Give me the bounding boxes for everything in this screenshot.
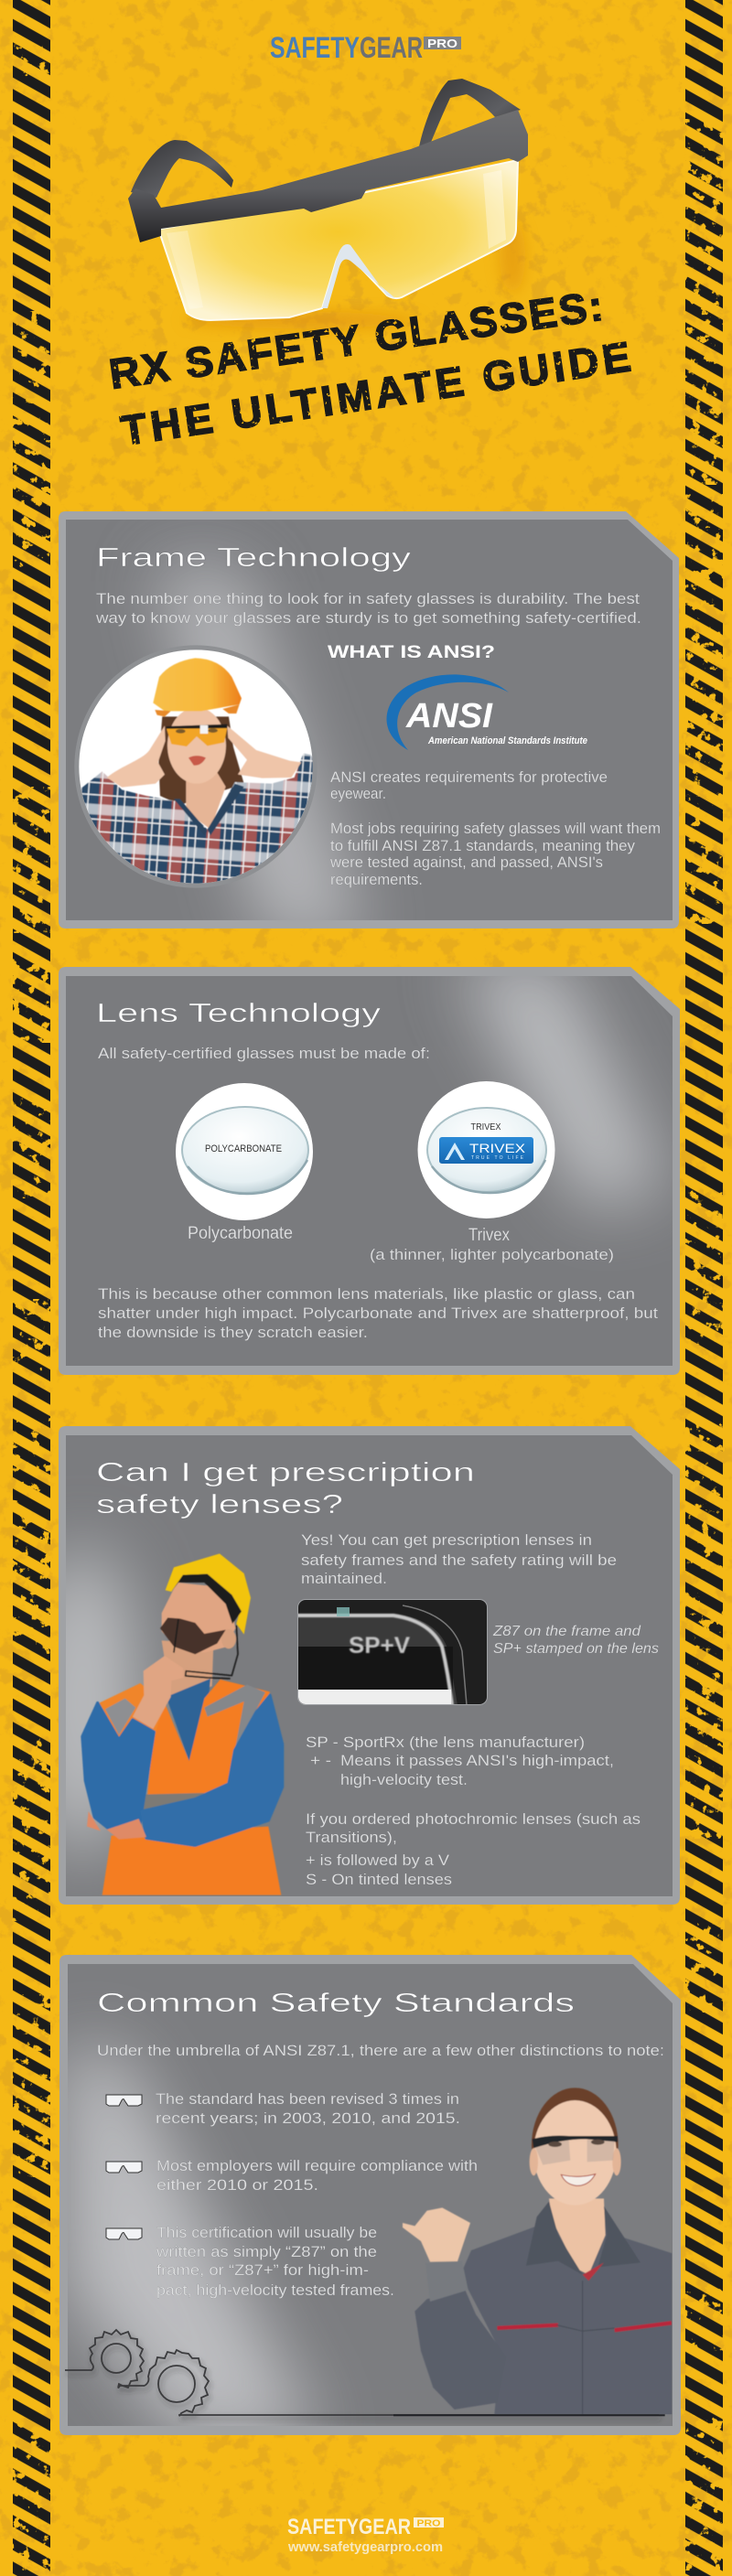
ANSI logo [387, 674, 587, 750]
website url: www.safetygearpro.com [287, 2539, 443, 2555]
explanation text [98, 1285, 658, 1341]
bullet 2 [156, 2157, 478, 2194]
bullet 1: The standard has been revised 3 times in [156, 2090, 459, 2108]
heading: Can I get prescription [96, 1458, 475, 1487]
ANSI description [329, 768, 661, 888]
stamp legend: S - On tinted lenses [306, 1871, 452, 1888]
photo: woman in hard hat [74, 645, 318, 888]
logo: footer: PRO [417, 2519, 441, 2528]
intro text: way to know your glasses are sturdy is to get something safety-certified. [95, 609, 641, 627]
stamp legend: Transitions), [306, 1829, 397, 1846]
labels: (a thinner, lighter polycarbonate) [370, 1246, 614, 1263]
bullet 1 [156, 2090, 460, 2127]
photo: woman giving thumbs up [393, 2088, 677, 2418]
logo: SafetyGear Pro [270, 31, 461, 64]
icon: trivex lens: TRUE TO LIFE [471, 1155, 524, 1161]
stamp legend [306, 1733, 640, 1888]
explanation text: This is because other common lens materials, like plastic or glass, can [98, 1285, 635, 1303]
icon: polycarbonate lens: POLYCARBONATE [205, 1143, 282, 1154]
title: THE ULTIMATE GUIDE [118, 332, 633, 455]
icon: bullet glasses 3 [106, 2228, 142, 2239]
photo caption: SP+ stamped on the lens [493, 1641, 659, 1657]
icon: trivex lens [417, 1081, 554, 1218]
icon: bullet glasses 1 [106, 2095, 142, 2106]
ANSI description: ANSI creates requirements for protective [330, 768, 608, 786]
panel: lens technology [59, 961, 680, 1375]
intro text: maintained. [301, 1570, 387, 1587]
ANSI description: eyewear. [330, 785, 386, 802]
title [106, 282, 633, 455]
heading: Common Safety Standards [97, 1989, 575, 2018]
photo: man thinking in hard hat [82, 1553, 283, 1895]
bullet 3: written as simply “Z87” on the [156, 2243, 377, 2260]
heading: Frame Technology [96, 543, 412, 573]
ANSI description: to fulfill ANSI Z87.1 standards, meaning they [330, 837, 635, 854]
labels [188, 1224, 614, 1263]
intro text: Under the umbrella of ANSI Z87.1, there are a few other distinctions to note: [97, 2042, 664, 2059]
icon: gears [65, 2330, 659, 2416]
intro text: The number one thing to look for in safety glasses is durability. The best [96, 590, 640, 607]
ANSI description: Most jobs requiring safety glasses will want them [330, 820, 661, 837]
heading: what is ANSI: WHAT IS ANSI? [328, 643, 495, 662]
safety glasses illustration [128, 79, 528, 328]
heading [96, 1458, 475, 1519]
icon: trivex lens: TRIVEX [469, 1141, 526, 1155]
title: RX SAFETY GLASSES: [106, 282, 606, 398]
intro text [95, 590, 641, 627]
bullet 3 [156, 2224, 394, 2299]
icon: bullet glasses 2 [106, 2162, 142, 2173]
logo: SafetyGear Pro: PRO [427, 37, 458, 50]
logo: SafetyGear Pro: GEAR [360, 31, 423, 64]
icon: trivex lens: TRIVEX [470, 1122, 501, 1132]
intro text: safety frames and the safety rating will be [301, 1551, 617, 1569]
stamp legend: high-velocity test. [340, 1771, 468, 1788]
stamp legend: SP - SportRx (the lens manufacturer) [306, 1733, 585, 1751]
bullet 3: frame, or “Z87+” for high-im- [156, 2261, 369, 2279]
labels: Polycarbonate [188, 1224, 293, 1243]
ANSI logo: American National Standards Institute [427, 735, 587, 746]
photo caption [492, 1624, 659, 1657]
bullet 1: recent years; in 2003, 2010, and 2015. [156, 2109, 460, 2127]
bullet 3: This certification will usually be [156, 2224, 377, 2241]
bullet 3: pact, high-velocity tested frames. [156, 2281, 394, 2299]
photo: lens stamp [297, 1599, 488, 1706]
logo: SafetyGear Pro: SAFETY [270, 31, 360, 64]
intro text [301, 1531, 617, 1587]
panel: prescription lenses [27, 1426, 680, 1905]
stamp legend: Means it passes ANSI's high-impact, [340, 1752, 614, 1769]
hazard stripes left [13, 0, 50, 2576]
explanation text: the downside is they scratch easier. [98, 1324, 368, 1341]
logo: footer: SAFETYGEAR [287, 2515, 411, 2539]
stamp legend: If you ordered photochromic lenses (such as [306, 1810, 640, 1828]
icon: polycarbonate lens [176, 1083, 313, 1220]
panel: common safety standards [59, 1955, 681, 2442]
ANSI logo: ANSI [405, 697, 493, 735]
intro text: Yes! You can get prescription lenses in [301, 1531, 592, 1549]
heading: Lens Technology [96, 999, 382, 1028]
ANSI description: requirements. [330, 871, 423, 888]
intro text: All safety-certified glasses must be made of: [98, 1045, 430, 1062]
bullet 2: either 2010 or 2015. [156, 2176, 318, 2194]
photo: lens stamp: SP+V [349, 1633, 410, 1658]
stamp legend: + - [310, 1752, 331, 1769]
photo caption: Z87 on the frame and [492, 1624, 641, 1639]
bullet 2: Most employers will require compliance with [156, 2157, 478, 2174]
labels: Trivex [468, 1226, 510, 1245]
explanation text: shatter under high impact. Polycarbonate and Trivex are shatterproof, but [98, 1304, 658, 1322]
heading: safety lenses? [96, 1490, 343, 1519]
panel: frame technology [59, 511, 679, 942]
ANSI description: were tested against, and passed, ANSI's [329, 853, 603, 871]
hazard stripes right [685, 0, 723, 2576]
stamp legend: + is followed by a V [306, 1852, 450, 1869]
